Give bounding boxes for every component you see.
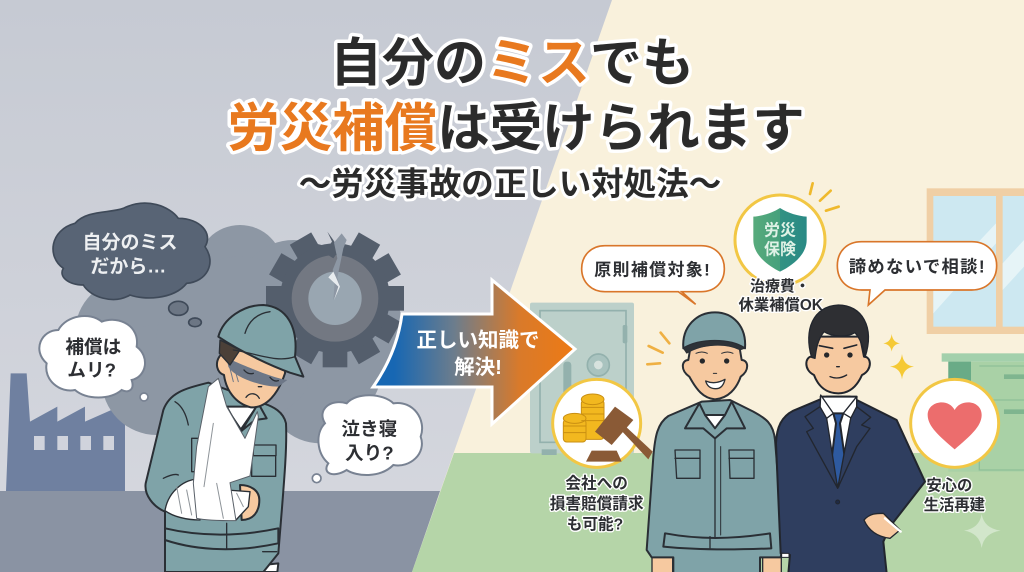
thought bubble: compensation impossible bbox=[39, 316, 148, 401]
lawyer in suit bbox=[776, 305, 925, 572]
title line 2: 労災補償は受けられます bbox=[227, 99, 805, 158]
right ground bbox=[412, 453, 1024, 572]
circle icon: insurance shield: 労災 bbox=[764, 222, 796, 240]
label: medical and leave benefits: 休業補償OK bbox=[739, 296, 823, 314]
label: damages claim: 損害賠償請求 bbox=[550, 494, 644, 513]
thought bubble: my own mistake: だから… bbox=[90, 257, 166, 278]
sad injured worker bbox=[145, 305, 303, 572]
left scene bbox=[6, 203, 422, 572]
label: medical and leave benefits: 治療費・ bbox=[750, 277, 810, 295]
thought bubble: give up bbox=[312, 395, 422, 483]
thought bubble: give up: 泣き寝 bbox=[341, 419, 397, 440]
sparkles bbox=[883, 334, 1001, 548]
speech bubble: covered in principle: 原則補償対象! bbox=[594, 259, 711, 279]
thought bubble: compensation impossible: 補償は bbox=[65, 336, 122, 357]
central arrow: correct knowledge: 解決! bbox=[454, 356, 502, 379]
circle icon: coins and gavel bbox=[553, 379, 653, 467]
subtitle: 〜労災事故の正しい対処法〜 bbox=[299, 166, 721, 202]
thought bubble: my own mistake: 自分のミス bbox=[83, 232, 177, 254]
speech bubble: do not give up: 諦めないで相談! bbox=[849, 257, 986, 277]
circle icon: insurance shield bbox=[735, 183, 839, 285]
dark smoke cloud bbox=[75, 225, 403, 443]
speech bubble: do not give up bbox=[837, 242, 997, 305]
window bbox=[927, 188, 1024, 334]
label: peace of mind: 安心の bbox=[926, 477, 972, 495]
thought bubble: compensation impossible: ムリ? bbox=[67, 360, 116, 381]
thought bubble: my own mistake bbox=[53, 203, 210, 327]
factory silhouette bbox=[6, 373, 125, 491]
title block bbox=[227, 35, 805, 202]
right scene bbox=[530, 183, 1024, 572]
circle icon: heart bbox=[911, 379, 999, 467]
label: medical and leave benefits bbox=[739, 277, 823, 314]
safe bbox=[530, 303, 634, 455]
left ground bbox=[0, 491, 440, 572]
speech bubble: covered in principle bbox=[582, 246, 724, 304]
label: damages claim bbox=[550, 475, 644, 534]
motion lines bbox=[647, 333, 669, 364]
central arrow: correct knowledge: 正しい知識で bbox=[416, 329, 540, 352]
label: peace of mind: 生活再建 bbox=[924, 497, 985, 514]
title line 1: 自分のミスでも bbox=[330, 35, 694, 93]
central arrow: correct knowledge bbox=[373, 280, 575, 424]
office desk bbox=[942, 353, 1024, 472]
happy worker bbox=[647, 312, 783, 572]
thought bubble: give up: 入り? bbox=[345, 442, 394, 463]
label: damages claim: も可能? bbox=[567, 515, 623, 534]
broken gear icon bbox=[266, 232, 404, 367]
circle icon: insurance shield: 保険 bbox=[764, 240, 796, 258]
background: right cream side bbox=[412, 0, 1024, 572]
label: peace of mind bbox=[924, 477, 985, 514]
label: damages claim: 会社への bbox=[565, 475, 628, 493]
